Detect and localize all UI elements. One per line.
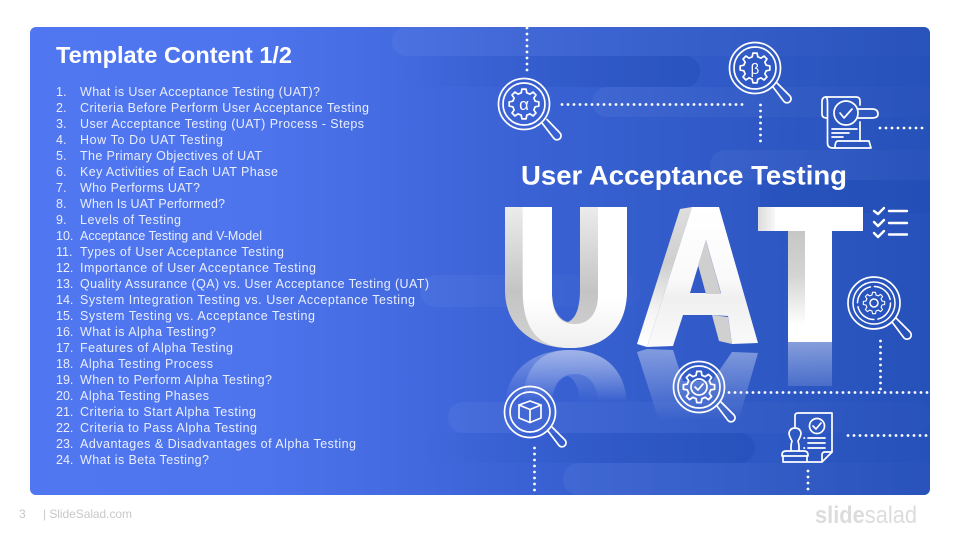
- table of contents list: Levels of Testing: [80, 213, 181, 227]
- table of contents list: 23.: [56, 437, 73, 451]
- table of contents list: Key Activities of Each UAT Phase: [80, 165, 278, 179]
- table of contents list: [56, 85, 429, 467]
- table of contents list: What is Alpha Testing?: [80, 325, 216, 339]
- table of contents list: 17.: [56, 341, 73, 355]
- reflection of UAT letters: [505, 342, 832, 491]
- table of contents list: What is Beta Testing?: [80, 453, 209, 467]
- table of contents list: 3.: [56, 117, 66, 131]
- table of contents list: Alpha Testing Process: [80, 357, 213, 371]
- table of contents list: 18.: [56, 357, 73, 371]
- table of contents list: Types of User Acceptance Testing: [80, 245, 284, 259]
- table of contents list: 8.: [56, 197, 66, 211]
- icon: stamp and document: [782, 413, 832, 462]
- table of contents list: System Testing vs. Acceptance Testing: [80, 309, 315, 323]
- icon: process gear magnifier: [848, 277, 911, 339]
- table of contents list: 16.: [56, 325, 73, 339]
- table of contents list: Criteria to Start Alpha Testing: [80, 405, 256, 419]
- 3D letter T: [758, 207, 863, 342]
- icon: beta gear magnifier: β: [751, 61, 760, 78]
- table of contents list: 5.: [56, 149, 66, 163]
- table of contents list: 14.: [56, 293, 73, 307]
- main title: User Acceptance Testing: [521, 160, 847, 190]
- table of contents list: Who Performs UAT?: [80, 181, 200, 195]
- icon: alpha gear magnifier: α: [519, 95, 529, 114]
- 3D letter U: [505, 207, 627, 348]
- dotted connectors: [527, 28, 929, 494]
- icon: alpha gear magnifier: [498, 78, 561, 140]
- table of contents list: 21.: [56, 405, 73, 419]
- table of contents list: How To Do UAT Testing: [80, 133, 223, 147]
- icon: check gear magnifier: [674, 362, 735, 422]
- table of contents list: 24.: [56, 453, 73, 467]
- table of contents list: When to Perform Alpha Testing?: [80, 373, 272, 387]
- table of contents list: Alpha Testing Phases: [80, 389, 209, 403]
- icon: beta gear magnifier: [730, 42, 791, 103]
- table of contents list: 9.: [56, 213, 66, 227]
- heading: Template Content: Template Content 1/2: [56, 42, 292, 68]
- 3D letter A: [637, 207, 758, 347]
- table of contents list: Acceptance Testing and V-Model: [80, 229, 262, 243]
- table of contents list: 11.: [56, 245, 72, 259]
- table of contents list: System Integration Testing vs. User Acceptance Testing: [80, 293, 415, 307]
- table of contents list: 20.: [56, 389, 73, 403]
- table of contents list: What is User Acceptance Testing (UAT)?: [80, 85, 320, 99]
- table of contents list: Quality Assurance (QA) vs. User Acceptance Testing (UAT): [80, 277, 429, 291]
- background bands: [448, 56, 754, 495]
- footer website: | SlideSalad.com: [43, 507, 132, 521]
- table of contents list: 15.: [56, 309, 73, 323]
- table of contents list: 1.: [56, 85, 66, 99]
- table of contents list: 13.: [56, 277, 73, 291]
- table of contents list: When Is UAT Performed?: [80, 197, 225, 211]
- icon: document with magnifier: [822, 97, 878, 148]
- table of contents list: 22.: [56, 421, 73, 435]
- table of contents list: The Primary Objectives of UAT: [80, 149, 262, 163]
- table of contents list: 7.: [56, 181, 66, 195]
- table of contents list: Importance of User Acceptance Testing: [80, 261, 316, 275]
- icon: box magnifier: [504, 386, 566, 447]
- table of contents list: 19.: [56, 373, 73, 387]
- icon: checklist: [874, 208, 907, 237]
- logo: slidesalad: slidesalad: [815, 502, 917, 529]
- table of contents list: 10.: [56, 229, 73, 243]
- table of contents list: User Acceptance Testing (UAT) Process - Steps: [80, 117, 364, 131]
- table of contents list: Advantages & Disadvantages of Alpha Testing: [80, 437, 356, 451]
- table of contents list: Features of Alpha Testing: [80, 341, 233, 355]
- page number: 3: [19, 507, 26, 521]
- table of contents list: 6.: [56, 165, 66, 179]
- table of contents list: 12.: [56, 261, 73, 275]
- table of contents list: Criteria to Pass Alpha Testing: [80, 421, 257, 435]
- table of contents list: 4.: [56, 133, 66, 147]
- table of contents list: 2.: [56, 101, 66, 115]
- table of contents list: Criteria Before Perform User Acceptance Testing: [80, 101, 369, 115]
